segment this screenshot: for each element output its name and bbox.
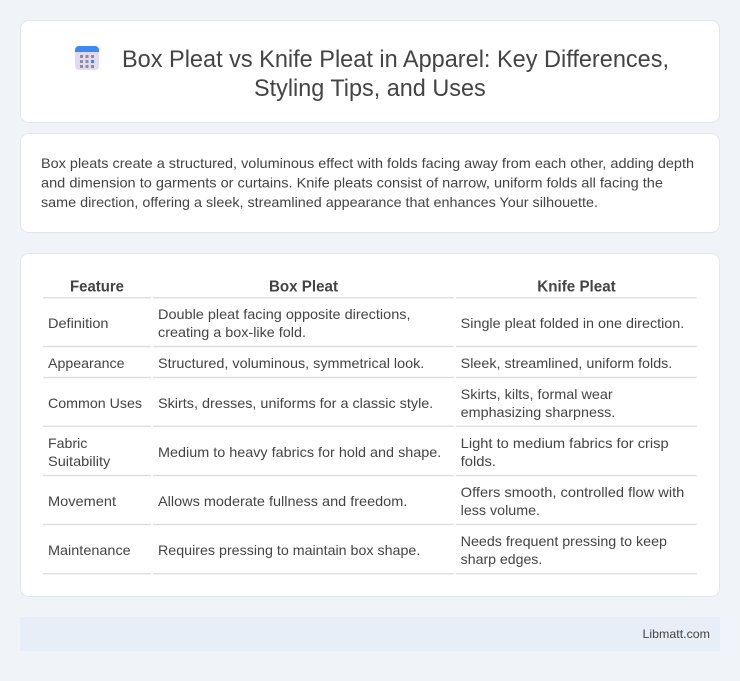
panel: footer <box>20 617 720 651</box>
row: definition: creating a box-like fold. <box>158 324 306 340</box>
panel: intro text <box>20 134 720 232</box>
row: common uses: Common Uses <box>48 395 142 411</box>
row: fabric suitability: Light to medium fabrics for crisp <box>461 435 669 451</box>
row: maintenance: Requires pressing to maintain box shape. <box>158 542 420 558</box>
intro paragraph <box>41 155 694 210</box>
row: appearance <box>48 355 672 371</box>
row: common uses: Skirts, kilts, formal wear <box>461 386 613 402</box>
row: maintenance: Maintenance <box>48 542 131 558</box>
row: definition: Single pleat folded in one direction. <box>461 315 684 331</box>
row: maintenance: sharp edges. <box>461 551 542 567</box>
row: fabric suitability <box>48 435 669 469</box>
row: movement: less volume. <box>461 502 540 518</box>
intro paragraph: and dimension to garments or curtains. Knife pleats consist of narrow, uniform folds all facing the <box>41 174 663 190</box>
row: appearance: Structured, voluminous, symmetrical look. <box>158 355 424 371</box>
row: definition: Double pleat facing opposite directions, <box>158 306 410 322</box>
icon: calendar grid <box>75 46 99 70</box>
row: movement <box>48 484 684 518</box>
row: fabric suitability: folds. <box>461 453 496 469</box>
row: maintenance: Needs frequent pressing to keep <box>461 533 667 549</box>
row: appearance: Sleek, streamlined, uniform folds. <box>461 355 672 371</box>
title: Box Pleat vs Knife Pleat in Apparel: Key Differences, <box>122 46 669 73</box>
row: common uses: Skirts, dresses, uniforms for a classic style. <box>158 395 433 411</box>
panel: comparison table <box>20 254 720 596</box>
table header row: Box Pleat <box>269 278 339 296</box>
row: maintenance <box>48 533 667 567</box>
row: definition: Definition <box>48 315 108 331</box>
table header row <box>70 278 616 296</box>
footer source text: Libmatt.com <box>642 627 710 641</box>
row: movement: Movement <box>48 493 116 509</box>
intro paragraph: same direction, offering a sleek, streamlined appearance that enhances Your silhouette. <box>41 194 598 210</box>
row: common uses <box>48 386 615 420</box>
panel: title header <box>20 20 720 122</box>
row: common uses: emphasizing sharpness. <box>461 404 615 420</box>
row: movement: Offers smooth, controlled flow with <box>461 484 684 500</box>
table header row: Feature <box>70 278 124 296</box>
row: fabric suitability: Fabric <box>48 435 87 451</box>
table rules <box>43 297 697 574</box>
table header row: Knife Pleat <box>537 278 616 296</box>
title <box>122 46 669 102</box>
title: Styling Tips, and Uses <box>254 75 486 102</box>
row: fabric suitability: Suitability <box>48 453 110 469</box>
row: appearance: Appearance <box>48 355 125 371</box>
row: definition <box>48 306 684 340</box>
row: fabric suitability: Medium to heavy fabrics for hold and shape. <box>158 444 441 460</box>
row: movement: Allows moderate fullness and freedom. <box>158 493 407 509</box>
intro paragraph: Box pleats create a structured, voluminous effect with folds facing away from each other, adding depth <box>41 155 694 171</box>
